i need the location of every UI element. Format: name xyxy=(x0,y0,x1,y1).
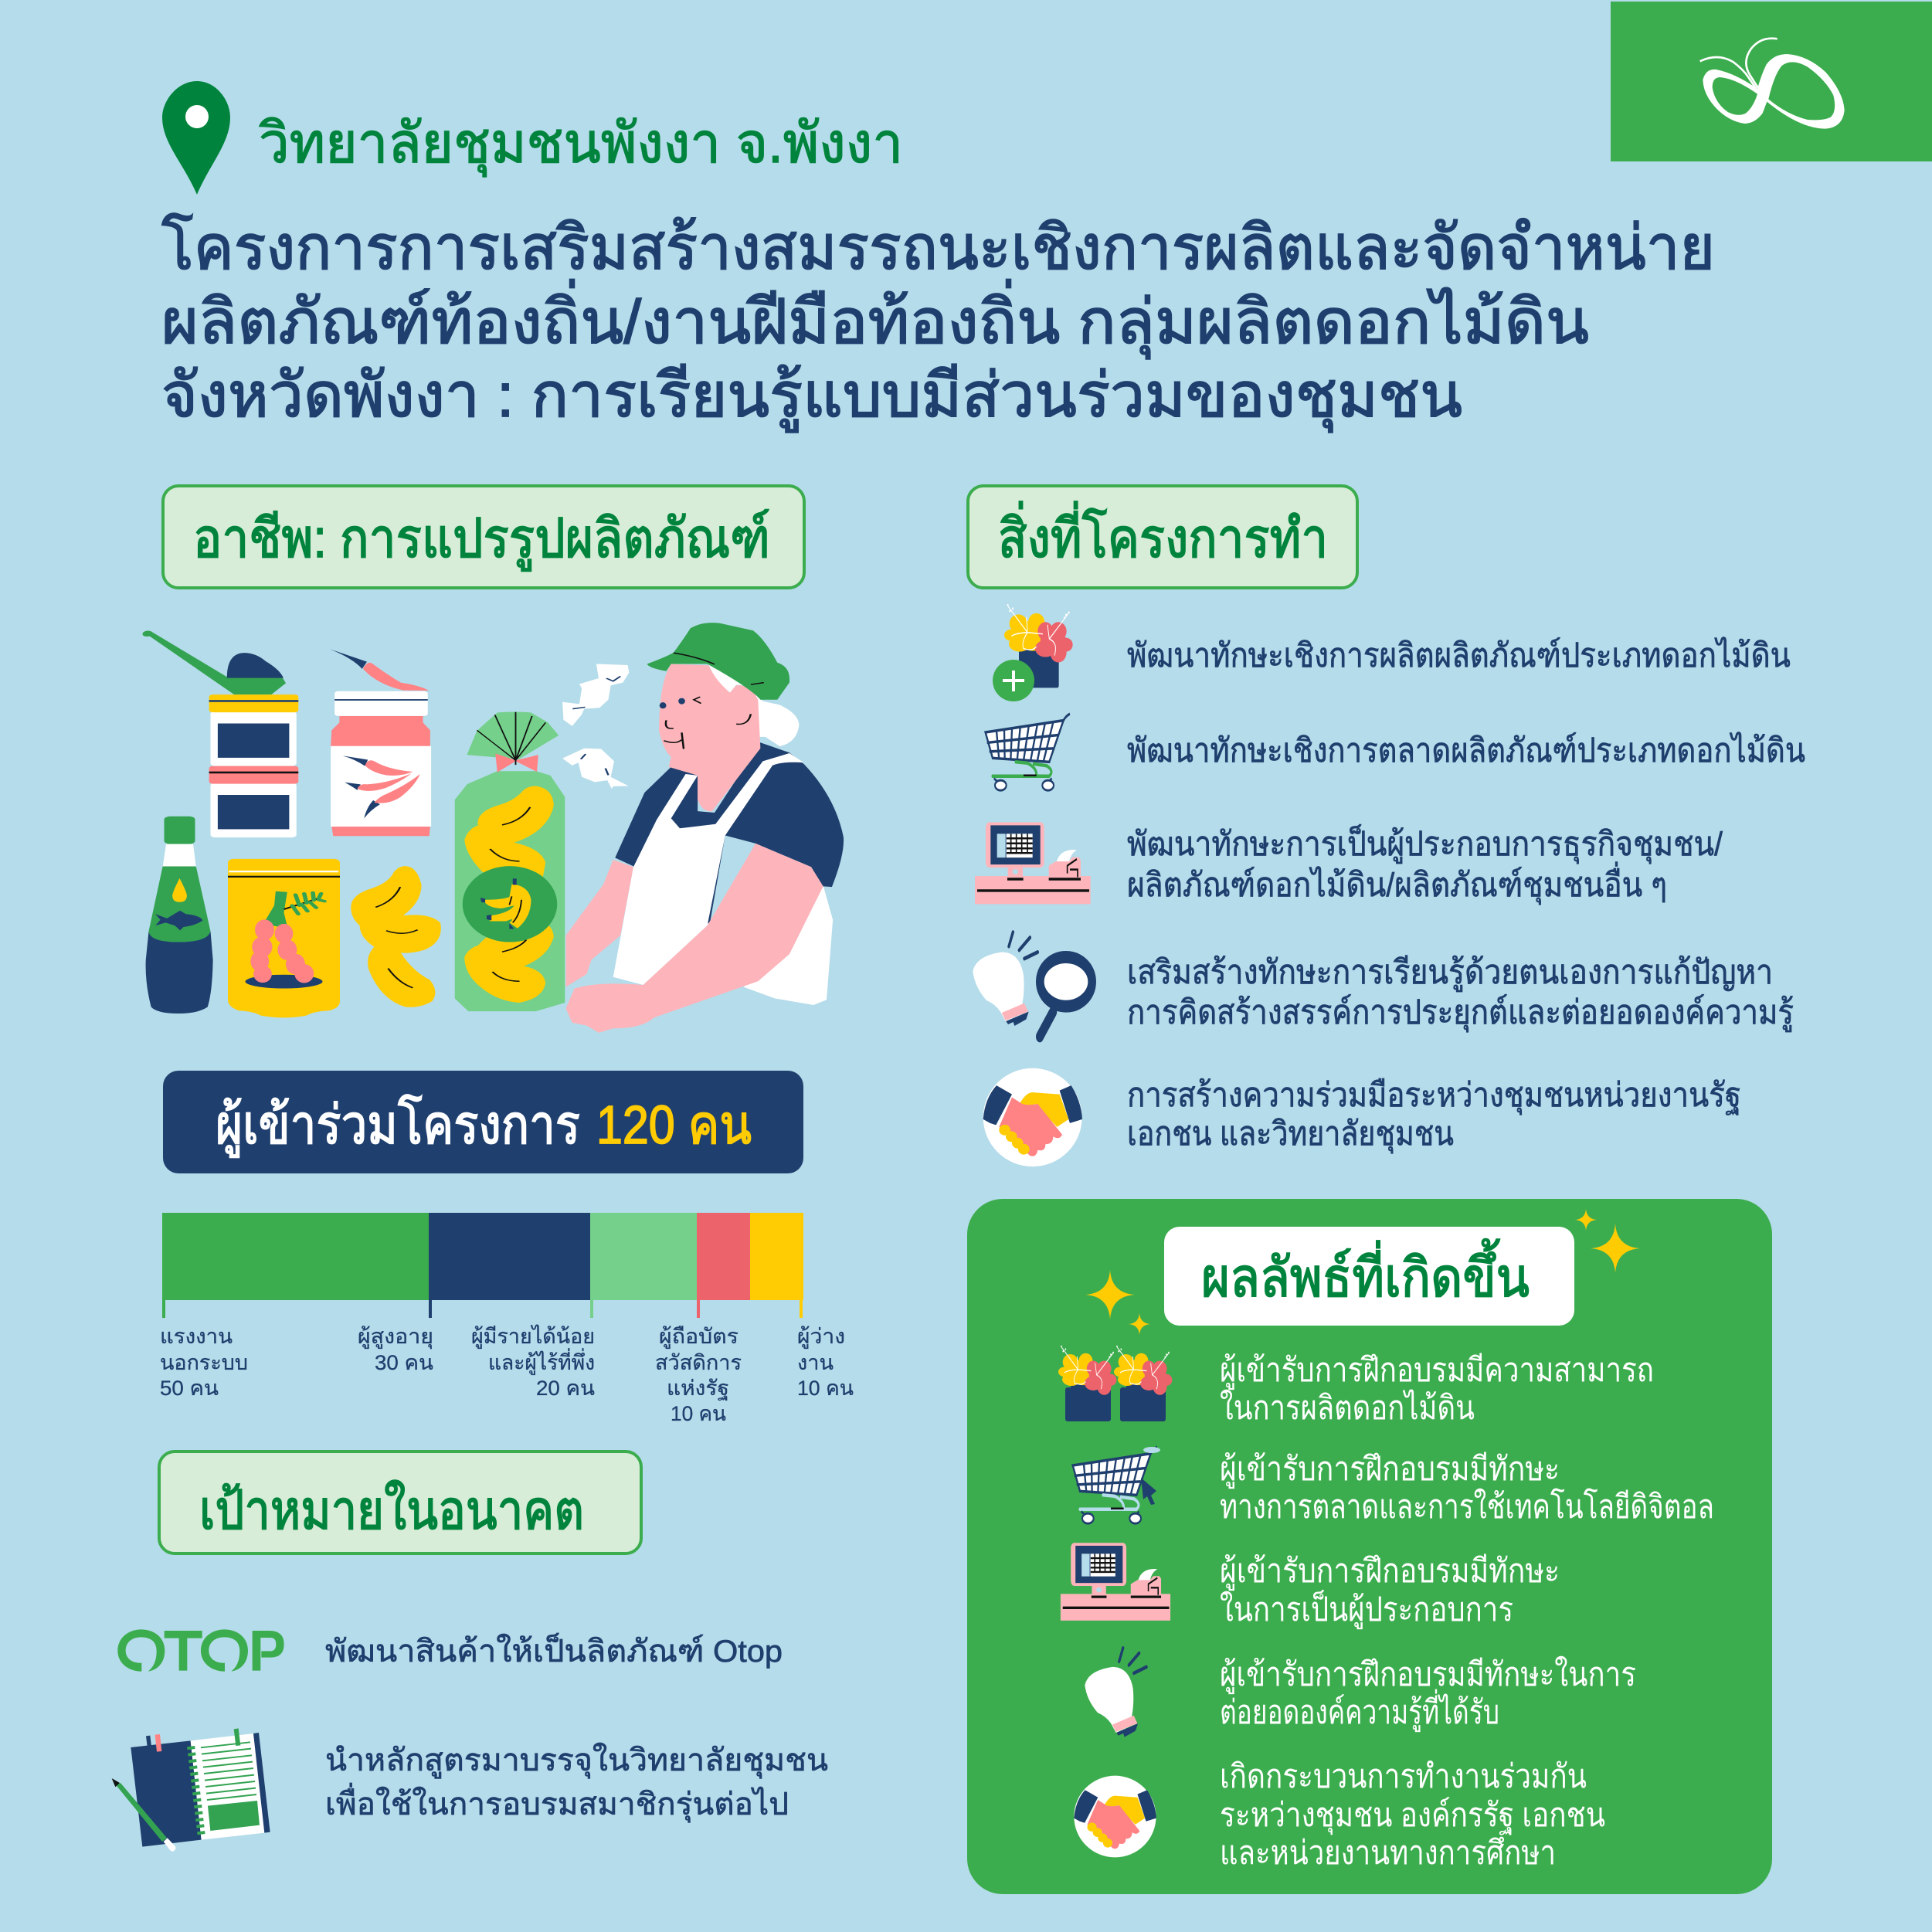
text: self learning skills: การคิดสร้างสรรค์การประยุกต์และต่อยอดองค์ความรู้ xyxy=(1127,994,1794,1033)
text: result entrepreneur: ผู้เข้ารับการฝึกอบรมมีทักษะ xyxy=(1220,1553,1560,1591)
text: curriculum goal: เพื่อใช้ในการอบรมสมาชิกรุ่นต่อไป xyxy=(325,1783,789,1823)
icon: shopping cart xyxy=(986,714,1070,790)
text: collaboration: เอกชน และวิทยาลัยชุมชน xyxy=(1127,1115,1454,1154)
icon: chili jar xyxy=(330,649,431,836)
icon: tamarind pack xyxy=(228,859,340,1017)
title: จังหวัดพังงา : การเรียนรู้แบบมีส่วนร่วมของชุมชน xyxy=(161,361,1462,433)
text: curriculum goal: นำหลักสูตรมาบรรจุในวิทยาลัยชุมชน xyxy=(325,1742,828,1779)
bar label: elderly xyxy=(358,1325,433,1374)
panel: results xyxy=(967,1199,1772,1894)
bar label: informal workers xyxy=(160,1325,248,1400)
icon: cart with cursor xyxy=(1073,1447,1160,1523)
banner: participants xyxy=(163,1071,803,1173)
text: result marketing xyxy=(1220,1451,1714,1526)
bar label: low income: และผู้ไร้ที่พึ่ง xyxy=(488,1348,595,1375)
stacked bar chart: participant groups xyxy=(160,1213,854,1425)
bar label: unemployed xyxy=(797,1325,854,1400)
title: โครงการการเสริมสร้างสมรรถนะเชิงการผลิตและจัดจำหน่าย xyxy=(161,212,1715,282)
bar label: elderly: 30 คน xyxy=(375,1351,433,1374)
icon: banana chips bag xyxy=(455,712,565,1011)
bar label: low income xyxy=(471,1325,595,1400)
illustration: woman with food products xyxy=(142,623,844,1033)
bar label: welfare card holders: สวัสดิการ xyxy=(655,1351,742,1374)
text: collaboration xyxy=(1127,1077,1741,1154)
text: result marketing: ผู้เข้ารับการฝึกอบรมมีทักษะ xyxy=(1220,1451,1560,1489)
bar label: welfare card holders xyxy=(655,1325,742,1425)
text: result entrepreneur xyxy=(1220,1553,1560,1630)
text: result production: ในการผลิตดอกไม้ดิน xyxy=(1220,1389,1475,1427)
text: result knowledge: ต่อยอดองค์ความรู้ที่ได้รับ xyxy=(1220,1689,1499,1733)
text: develop marketing skills: พัฒนาทักษะเชิงการตลาดผลิตภัณฑ์ประเภทดอกไม้ดิน xyxy=(1127,732,1805,769)
banner: participants: ผู้เข้าร่วมโครงการ xyxy=(216,1094,580,1158)
bar label: unemployed: ผู้ว่าง xyxy=(797,1325,845,1349)
icon: OTOP logo xyxy=(117,1629,284,1672)
icon: cashier desk xyxy=(975,822,1091,904)
logo panel xyxy=(1611,2,1932,161)
title: ผลิตภัณฑ์ท้องถิ่น/งานฝีมือท้องถิ่น กลุ่มผลิตดอกไม้ดิน xyxy=(161,280,1589,359)
text: result collaboration xyxy=(1220,1758,1605,1872)
icon: cashier desk xyxy=(1061,1543,1170,1621)
text: self learning skills: เสริมสร้างทักษะการเรียนรู้ด้วยตนเองการแก้ปัญหา xyxy=(1127,954,1773,993)
text: develop production skills: พัฒนาทักษะเชิงการผลิตผลิตภัณฑ์ประเภทดอกไม้ดิน xyxy=(1127,637,1791,674)
icon: handshake xyxy=(1074,1776,1156,1857)
text: result production xyxy=(1220,1352,1654,1427)
bar label: unemployed: งาน xyxy=(797,1351,834,1374)
text: result collaboration: เกิดกระบวนการทำงานร่วมกัน xyxy=(1220,1758,1587,1795)
bar label: low income: ผู้มีรายได้น้อย xyxy=(471,1325,595,1349)
text: result production: ผู้เข้ารับการฝึกอบรมมีความสามารถ xyxy=(1220,1352,1654,1390)
icon: notebook and pen xyxy=(112,1728,270,1852)
figure: woman xyxy=(565,623,844,1033)
banner: participants: 120 คน xyxy=(596,1095,752,1155)
heading: college location: วิทยาลัยชุมชนพังงา จ.พังงา xyxy=(259,113,903,177)
bar label: elderly: ผู้สูงอายุ xyxy=(358,1325,433,1350)
heading: results xyxy=(1164,1227,1574,1326)
icon: location pin xyxy=(162,81,230,195)
text: result collaboration: และหน่วยงานทางการศึกษา xyxy=(1220,1835,1556,1872)
icon: stacked jars xyxy=(209,694,298,837)
icon: flower pot with plus xyxy=(993,604,1073,701)
heading box: what the project did xyxy=(968,486,1357,588)
text: entrepreneur skills: พัฒนาทักษะการเป็นผู้ประกอบการธุรกิจชุมชน/ xyxy=(1127,824,1723,864)
text: result knowledge xyxy=(1220,1655,1636,1733)
text: result entrepreneur: ในการเป็นผู้ประกอบการ xyxy=(1220,1590,1513,1630)
bar label: informal workers: 50 คน xyxy=(160,1377,219,1400)
text: self learning skills xyxy=(1127,954,1794,1033)
heading: results: ผลลัพธ์ที่เกิดขึ้น xyxy=(1201,1238,1530,1308)
heading box: what the project did: สิ่งที่โครงการทำ xyxy=(998,501,1328,569)
title xyxy=(161,212,1715,433)
icon: sparkles xyxy=(1085,1209,1640,1335)
icon: two flower pots xyxy=(1058,1346,1172,1421)
icon: candies xyxy=(562,664,629,789)
bar label: informal workers: นอกระบบ xyxy=(160,1351,248,1374)
icon: light bulb xyxy=(1085,1648,1146,1737)
text: entrepreneur skills: ผลิตภัณฑ์ดอกไม้ดิน/ผลิตภัณฑ์ชุมชนอื่น ๆ xyxy=(1127,862,1667,905)
heading box: occupation xyxy=(163,486,804,588)
bar label: informal workers: แรงงาน xyxy=(160,1325,233,1348)
text: collaboration: การสร้างความร่วมมือระหว่างชุมชนหน่วยงานรัฐ xyxy=(1127,1077,1741,1115)
text: result knowledge: ผู้เข้ารับการฝึกอบรมมีทักษะในการ xyxy=(1220,1655,1636,1695)
bar label: low income: 20 คน xyxy=(536,1377,595,1400)
icon: ladle xyxy=(142,630,286,694)
text: OTOP goal: พัฒนาสินค้าให้เป็นลิตภัณฑ์ Otop xyxy=(325,1632,783,1669)
text: curriculum goal xyxy=(325,1742,828,1823)
heading box: occupation: อาชีพ: การแปรรูปผลิตภัณฑ์ xyxy=(193,508,770,572)
text: result collaboration: ระหว่างชุมชน องค์กรรัฐ เอกชน xyxy=(1220,1797,1605,1835)
icon: light bulb and magnifier xyxy=(973,932,1092,1037)
bar label: welfare card holders: ผู้ถือบัตร xyxy=(659,1325,739,1349)
bar label: welfare card holders: 10 คน xyxy=(671,1402,726,1425)
heading box: future goals: เป้าหมายในอนาคต xyxy=(199,1479,584,1540)
icon: loose banana chips xyxy=(351,866,441,1007)
text: entrepreneur skills xyxy=(1127,824,1723,905)
heading box: future goals xyxy=(159,1452,641,1553)
icon: butterfly infinity logo xyxy=(1700,39,1845,129)
bar label: unemployed: 10 คน xyxy=(797,1377,854,1400)
icon: handshake xyxy=(983,1068,1082,1166)
bar label: welfare card holders: แห่งรัฐ xyxy=(667,1377,729,1401)
text: result marketing: ทางการตลาดและการใช้เทคโนโลยีดิจิตอล xyxy=(1220,1488,1714,1526)
icon: fish sauce bottle xyxy=(146,817,213,1014)
